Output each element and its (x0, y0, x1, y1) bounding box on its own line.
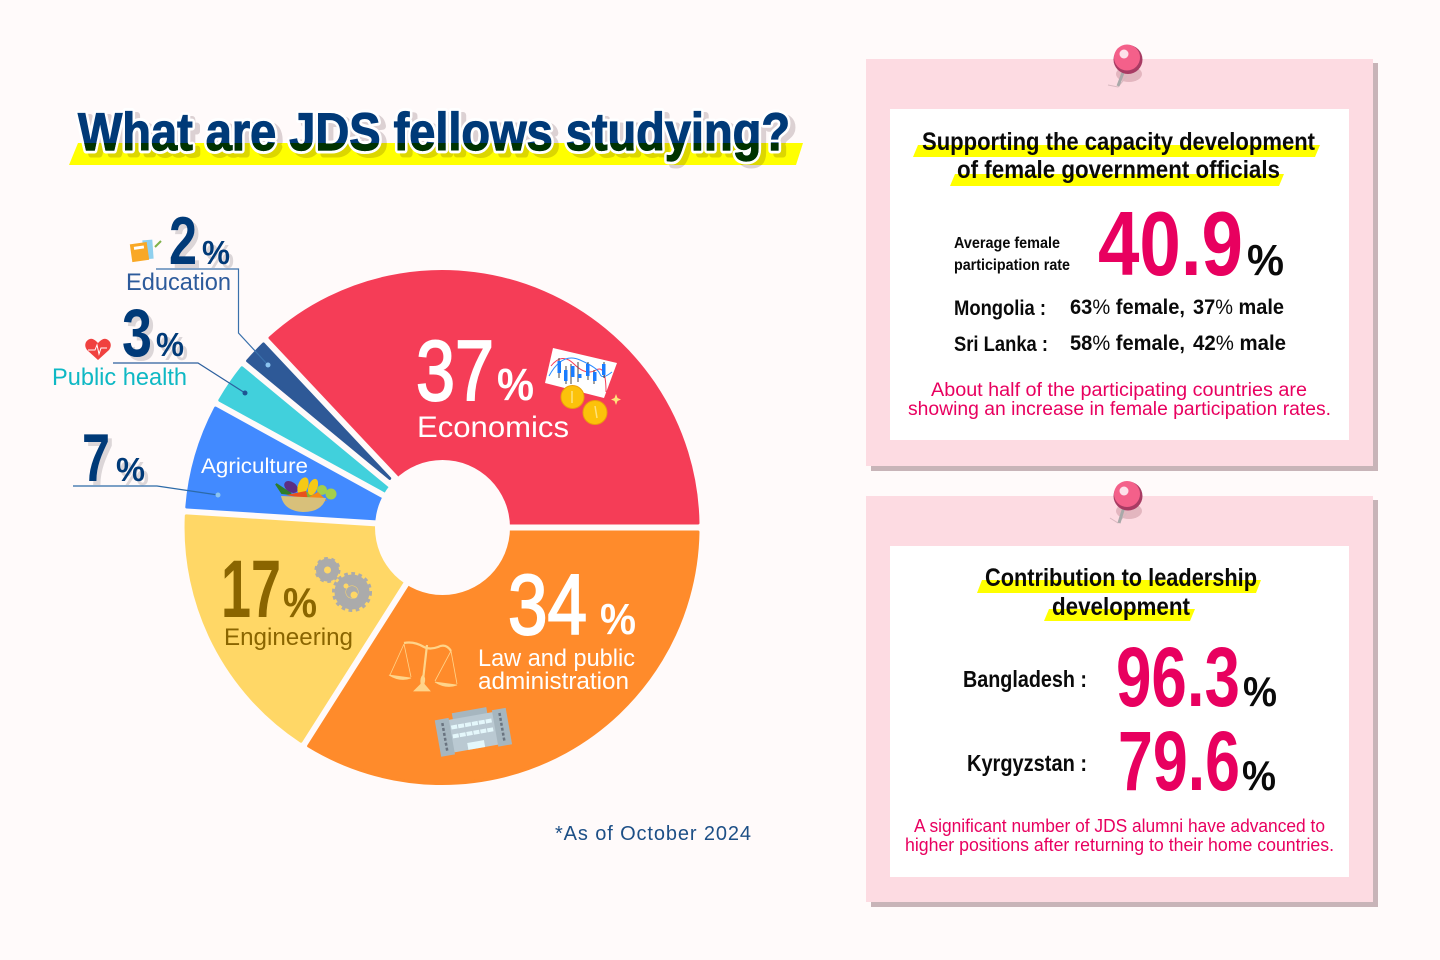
note text (905, 816, 1334, 855)
country rows: Sri Lanka : (954, 333, 1048, 356)
label: public health: Public health (52, 364, 187, 391)
icon: stock chart and coins (545, 348, 621, 424)
stat: Bangladesh (963, 630, 1277, 724)
panel: female government officials (866, 44, 1378, 471)
slice: law and public administration (309, 532, 698, 784)
leader line: agriculture (73, 486, 220, 498)
label: agriculture share: % (120, 455, 149, 492)
label: education (126, 203, 234, 296)
icon: gears (316, 559, 370, 610)
label: agriculture share: % (116, 451, 145, 488)
leader line: education (156, 269, 270, 368)
label: agriculture: Agriculture (201, 455, 308, 478)
slice: engineering (186, 516, 434, 741)
label: public health: % (160, 330, 188, 367)
label: public health: 3 (122, 295, 152, 371)
note text (908, 380, 1331, 420)
label: public health (52, 295, 188, 391)
label: law and public administration: administration (478, 668, 629, 695)
heading: development (1052, 593, 1191, 621)
label: law and public administration: Law and public (478, 645, 635, 672)
label: law and public administration: % (600, 595, 636, 644)
stat: Kyrgyzstan (967, 714, 1276, 808)
label: law and public administration: 34 (508, 558, 587, 653)
stat: Bangladesh: % (1243, 668, 1277, 715)
icon: books (130, 240, 161, 262)
footnote: *As of October 2024 (555, 823, 751, 845)
average rate label (954, 235, 1070, 274)
label: education: 2 (169, 203, 197, 279)
stat: Bangladesh: Bangladesh : (963, 666, 1087, 692)
average rate label: Average female (954, 235, 1060, 252)
label: engineering (221, 544, 353, 651)
title: What are JDS fellows studying? (78, 103, 790, 162)
country rows: Mongolia : (954, 297, 1046, 320)
icon: pin (1108, 44, 1142, 87)
label: education: Education (126, 269, 231, 296)
label: public health: % (156, 326, 184, 363)
country rows: 42% male (1193, 331, 1286, 355)
heading: of female government officials (957, 156, 1280, 184)
label: agriculture share: 7 (86, 424, 114, 500)
title: What are JDS fellows studying? (83, 107, 795, 166)
label: engineering: Engineering (224, 624, 353, 651)
stat: Kyrgyzstan: 79.6 (1118, 714, 1240, 808)
note text: higher positions after returning to their home countries. (905, 835, 1334, 855)
stat: Bangladesh: 96.3 (1116, 630, 1240, 724)
label: agriculture share (82, 420, 149, 500)
label: economics: 37 (416, 324, 494, 419)
stat: Kyrgyzstan: % (1242, 752, 1276, 799)
leader line: public health (113, 363, 248, 396)
title: What are JDS fellows studying? (78, 103, 790, 162)
stat: Kyrgyzstan: Kyrgyzstan : (967, 750, 1087, 776)
label: education: % (206, 238, 234, 275)
country rows: 37% male (1193, 295, 1284, 319)
icon: heart (85, 339, 111, 360)
heading: Contribution to leadership (985, 564, 1257, 592)
label: public health: 3 (126, 299, 156, 375)
title: What are JDS fellows studying? (78, 103, 790, 162)
country rows: 63% female, (1070, 295, 1185, 319)
label: economics (416, 324, 569, 444)
slice: public health (220, 368, 402, 501)
label: economics: Economics (417, 411, 569, 444)
slice: education (248, 344, 390, 478)
note text: A significant number of JDS alumni have advanced to (914, 816, 1325, 836)
icon: vegetable basket (276, 476, 336, 512)
slice: agriculture (187, 408, 422, 522)
icon: pin (1110, 481, 1142, 523)
label: engineering: 17 (221, 544, 281, 635)
icon: government building (434, 704, 512, 757)
slice: economics (270, 271, 698, 523)
heading (913, 128, 1320, 186)
country rows: 58% female, (1070, 331, 1185, 355)
label: agriculture share: 7 (82, 420, 110, 496)
note text: showing an increase in female participation rates. (908, 399, 1331, 420)
average rate label: participation rate (954, 257, 1070, 274)
centre hole (375, 460, 510, 595)
big number: 40.9%: % (1247, 236, 1284, 285)
icon: scales of justice (389, 642, 457, 691)
pie chart (186, 271, 698, 784)
big number: 40.9%: 40.9 (1098, 194, 1243, 295)
label: engineering: % (283, 579, 317, 626)
country rows (954, 295, 1286, 356)
panel: leadership development (866, 481, 1378, 907)
note text: About half of the participating countries are (931, 380, 1307, 401)
label: education: % (202, 234, 230, 271)
label: law and public administration (478, 558, 636, 695)
label: education: 2 (173, 207, 201, 283)
heading (977, 564, 1261, 621)
label: economics: % (497, 359, 534, 410)
heading: Supporting the capacity development (922, 128, 1316, 156)
